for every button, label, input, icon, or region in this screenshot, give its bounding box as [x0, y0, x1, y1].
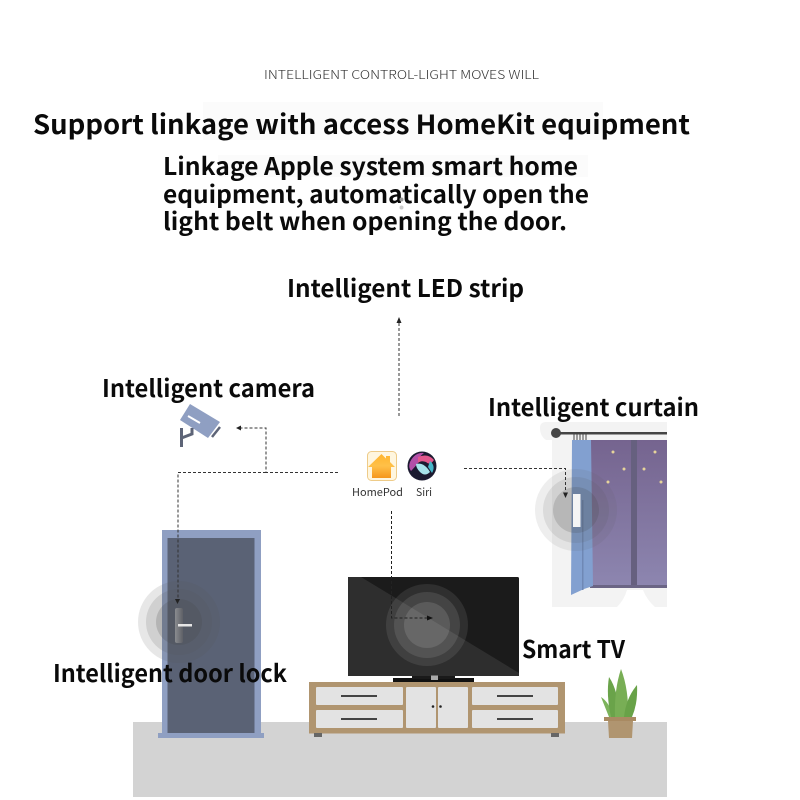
label: Intelligent curtain: Intelligent curtain: [488, 388, 699, 423]
label: Siri: Siri: [416, 485, 432, 500]
label: HomePod: HomePod: [352, 485, 403, 500]
icon: Siri: [408, 452, 436, 480]
description text: Linkage Apple system smart home: [163, 147, 578, 182]
icon: camera: [180, 404, 220, 447]
door lock with signal rings: [138, 581, 220, 663]
arrow: to door lock: [175, 472, 266, 604]
label: Intelligent LED strip: Intelligent LED strip: [287, 269, 524, 304]
plant: [601, 669, 637, 738]
smart tv with signal rings: [348, 577, 519, 682]
icon: HomePod: [368, 452, 396, 480]
label: Smart TV: Smart TV: [522, 630, 625, 665]
tv stand cabinet: [309, 682, 565, 737]
label: Intelligent door lock: Intelligent door lock: [53, 654, 287, 689]
description text: [163, 147, 589, 237]
arrow: to LED strip: [396, 317, 402, 416]
description text: light belt when opening the door.: [163, 202, 567, 237]
floor: [133, 722, 667, 797]
arrow: to curtain: [464, 468, 568, 498]
curtain window with signal rings: [535, 422, 667, 607]
label: Intelligent camera: Intelligent camera: [102, 369, 315, 404]
subtitle: INTELLIGENT CONTROL-LIGHT MOVES WILL: [264, 64, 540, 83]
arrow: to camera: [236, 426, 338, 472]
heading: Support linkage with access HomeKit equipment: [33, 103, 690, 142]
faint background bands: [203, 102, 603, 177]
arrow: to tv: [392, 511, 433, 620]
description text: equipment, automatically open the: [163, 175, 589, 210]
door: [158, 530, 264, 738]
